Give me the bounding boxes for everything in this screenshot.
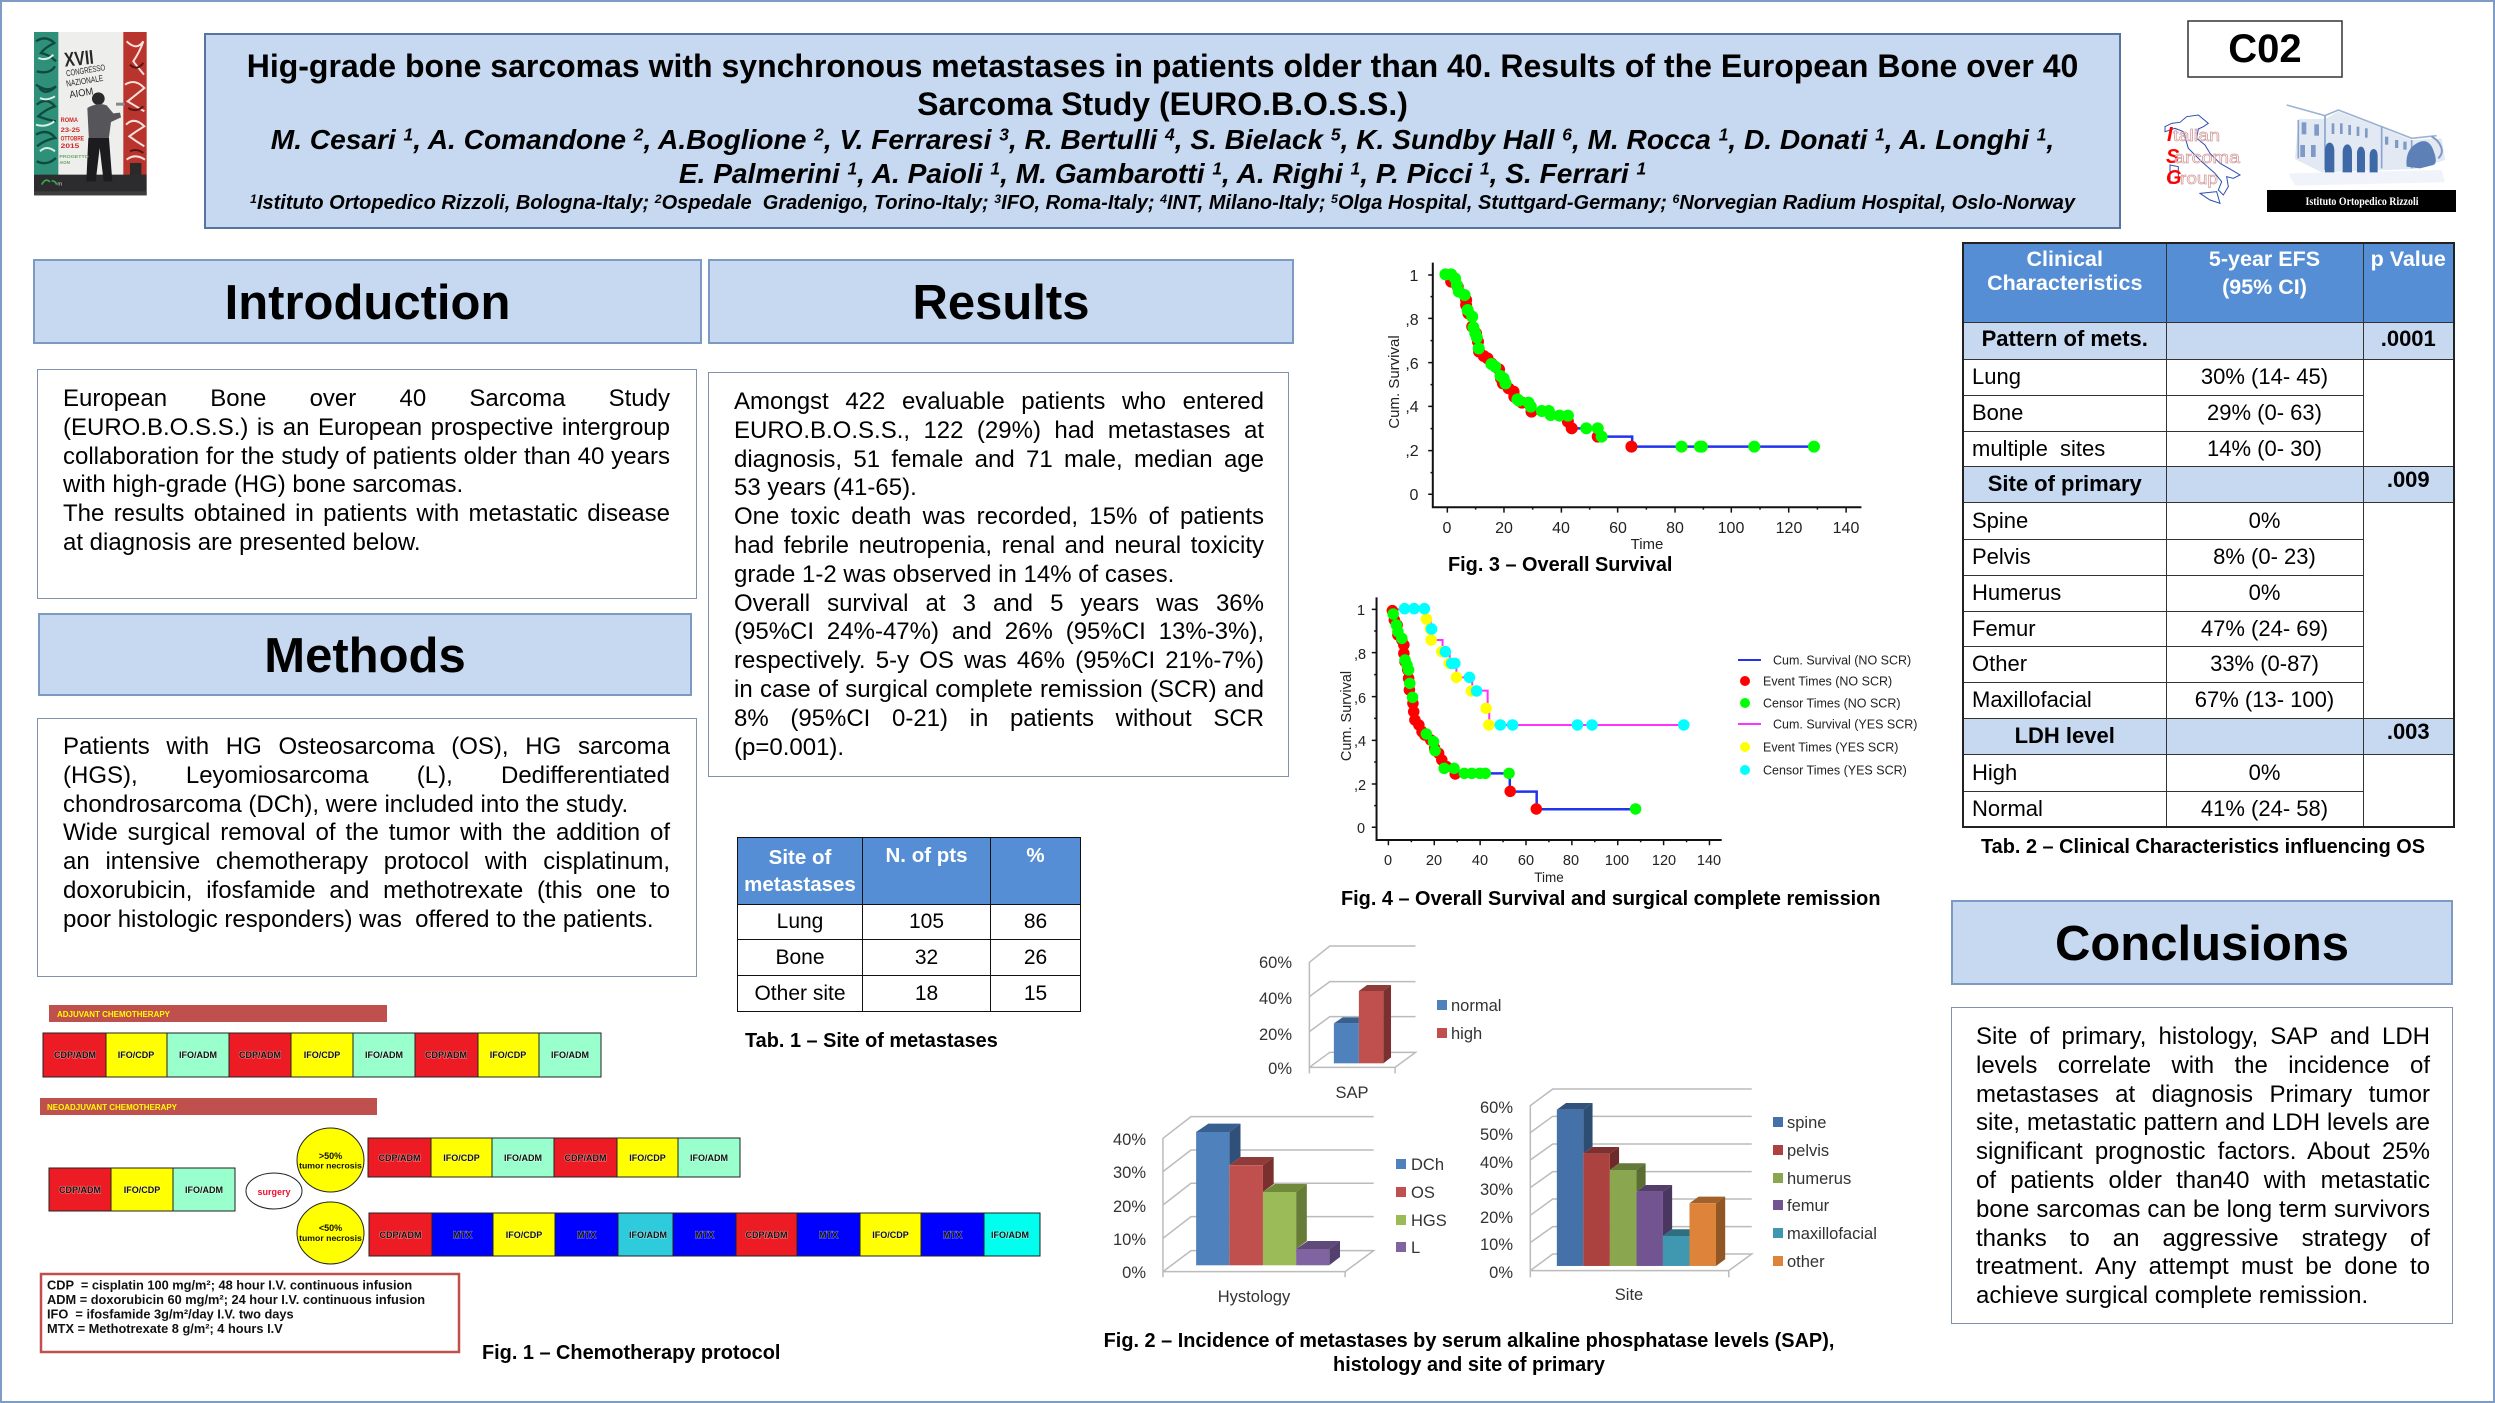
poster thumbnail logo: CONGRESSO <box>65 62 106 78</box>
table 2: clinical characteristics influencing OS: multiple sites <box>1972 436 2105 461</box>
table 2: clinical characteristics influencing OS: High <box>1972 760 2017 784</box>
axis labels: 1 <box>1357 603 1365 619</box>
poor responder cycle row: MTX <box>577 1230 596 1240</box>
adjuvant cycle row: IFO/ADM <box>365 1050 403 1060</box>
axis labels: Cum. Survival <box>1339 671 1355 761</box>
poster thumbnail logo: PROGETTO <box>59 154 89 159</box>
axis labels: ,2 <box>1354 778 1366 794</box>
poster thumbnail logo: m <box>57 181 62 187</box>
axis labels: 100 <box>1718 520 1744 537</box>
table 2: clinical characteristics influencing OS: .0001 <box>2381 326 2436 350</box>
axis labels: 20 <box>1426 853 1442 869</box>
axis labels: 1 <box>1410 268 1419 285</box>
Italian Sarcoma Group logo: S <box>2166 146 2180 168</box>
drug legend: IFO = ifosfamide 3g/m²/day I.V. two days <box>47 1306 294 1322</box>
panel: introduction text: with high-grade (HG) bone sarcomas. <box>63 471 463 498</box>
caption: figure 2: histology and site of primary <box>1333 1354 1605 1376</box>
figure 2: primary site bar chart: femur <box>1787 1197 1830 1215</box>
panel: results text: Amongst 422 evaluable patients who entered <box>734 388 1264 415</box>
table 2: clinical characteristics influencing OS: Characteristics <box>1987 271 2142 295</box>
legend: Censor Times (YES SCR) <box>1763 764 1907 778</box>
table 1: site of metastases: 86 <box>1024 910 1047 933</box>
table 2: clinical characteristics influencing OS: Humerus <box>1972 580 2061 605</box>
panel: results text: diagnosis, 51 female and 71 male, median age <box>734 446 1264 473</box>
figure 2: primary site bar chart: humerus <box>1787 1170 1851 1188</box>
heading: introduction: Introduction <box>225 276 510 330</box>
panel: methods text: poor histologic responders) was offered to the patients. <box>63 906 654 933</box>
adjuvant banner <box>49 1005 387 1022</box>
good response node: tumor necrosis <box>299 1160 362 1170</box>
panel: methods text: Wide surgical removal of the tumor with the addition of <box>63 819 670 846</box>
good response node: >50% <box>319 1151 342 1161</box>
axis labels: ,8 <box>1405 312 1419 329</box>
figure 2: primary site bar chart: 40% <box>1480 1154 1513 1172</box>
panel: introduction text: collaboration for the study of patients older than 40 years <box>63 443 670 470</box>
adjuvant cycle row: IFO/CDP <box>490 1050 526 1060</box>
figure 2: primary site bar chart: 0% <box>1489 1264 1513 1282</box>
panel: introduction text <box>37 369 697 599</box>
good responder cycle row <box>368 1138 740 1177</box>
table 1: site of metastases: % <box>1026 844 1045 867</box>
neoadjuvant induction row: IFO/ADM <box>185 1185 223 1195</box>
heading: introduction <box>33 259 702 344</box>
table 1: site of metastases: 26 <box>1024 946 1047 968</box>
Italian Sarcoma Group logo: arcoma <box>2174 148 2241 167</box>
table 2: clinical characteristics influencing OS: p Value <box>2371 247 2446 271</box>
axis labels: 80 <box>1666 520 1684 537</box>
good responder cycle row: CDP/ADM <box>378 1153 420 1163</box>
poor responder cycle row: MTX <box>453 1230 472 1240</box>
neoadjuvant induction row: IFO/CDP <box>124 1185 160 1195</box>
table 2: clinical characteristics influencing OS: 0% <box>2249 580 2280 605</box>
heading: conclusions <box>1951 900 2453 985</box>
axis labels: 120 <box>1652 853 1676 869</box>
figure 2: histology bar chart: L <box>1411 1239 1420 1257</box>
table 1: site of metastases: N. of pts <box>886 844 968 867</box>
legend: Event Times (YES SCR) <box>1763 740 1898 754</box>
table 1: site of metastases: Lung <box>777 910 823 933</box>
table 1: site of metastases: 105 <box>909 910 944 933</box>
figure 2: primary site bar chart: pelvis <box>1787 1142 1829 1160</box>
panel: conclusions text: significant prognostic factors. About 25% <box>1976 1138 2430 1165</box>
table 2: clinical characteristics influencing OS: .009 <box>2387 467 2430 492</box>
Istituto Ortopedico Rizzoli logo: Istituto Ortopedico Rizzoli <box>2306 196 2419 208</box>
caption: table 1: Tab. 1 – Site of metastases <box>745 1030 998 1052</box>
table 2: clinical characteristics influencing OS: Site of primary <box>1988 471 2142 496</box>
good responder cycle row: IFO/ADM <box>690 1153 728 1163</box>
surgery node: surgery <box>257 1187 291 1197</box>
good responder cycle row: IFO/CDP <box>443 1153 480 1163</box>
panel: methods text: doxorubicin, ifosfamide and methotrexate (this one to <box>63 877 670 904</box>
adjuvant cycle row: IFO/ADM <box>179 1050 217 1060</box>
caption: figure 1: Fig. 1 – Chemotherapy protocol <box>482 1342 780 1364</box>
table 2: clinical characteristics influencing OS: (95% CI) <box>2222 275 2307 299</box>
table 2: clinical characteristics influencing OS <box>1962 242 2455 828</box>
poster thumbnail logo: ROMA <box>61 117 78 124</box>
panel: results text: grade 1-2 was observed in 14% of cases. <box>734 561 1174 588</box>
Italian Sarcoma Group logo: I <box>2167 124 2173 146</box>
axes <box>1428 263 1861 513</box>
figure 1: chemotherapy protocol <box>40 1005 1040 1352</box>
panel: conclusions text: bone sarcomas can be long term survivors <box>1976 1196 2430 1223</box>
table 2: clinical characteristics influencing OS: 14% (0- 30) <box>2207 436 2322 461</box>
figure 2: SAP bar chart <box>1259 946 1501 1102</box>
figure 2: primary site bar chart <box>1480 1089 1877 1304</box>
axis labels: 0 <box>1357 821 1365 837</box>
figure 2: histology bar chart <box>1113 1117 1447 1306</box>
adjuvant cycle row <box>43 1033 601 1077</box>
axis labels: 100 <box>1605 853 1629 869</box>
heading: results: Results <box>912 276 1090 330</box>
poor responder cycle row <box>369 1213 1040 1256</box>
panel: results text: Overall survival at 3 and 5 years was 36% <box>734 590 1264 617</box>
table 1: site of metastases: Bone <box>775 946 825 968</box>
adjuvant cycle row: IFO/ADM <box>551 1050 589 1060</box>
figure 2: histology bar chart: 30% <box>1113 1164 1146 1182</box>
axis labels: ,6 <box>1405 356 1419 373</box>
poster thumbnail logo <box>34 32 147 195</box>
table 2: clinical characteristics influencing OS: 29% (0- 63) <box>2207 400 2322 425</box>
table 2: clinical characteristics influencing OS: Clinical <box>2027 247 2103 271</box>
axis labels: Cum. Survival <box>1386 335 1403 429</box>
legend: Cum. Survival (NO SCR) <box>1773 654 1911 668</box>
panel: methods text <box>37 718 697 977</box>
poor responder cycle row: IFO/ADM <box>629 1230 667 1240</box>
curves <box>1372 597 1722 845</box>
poster thumbnail logo: 2015 <box>61 143 80 150</box>
drug legend: ADM = doxorubicin 60 mg/m²; 24 hour I.V. continuous infusion <box>47 1292 425 1307</box>
panel: results text: respectively. 5-y OS was 46% (95%CI 21%-7%) <box>734 647 1264 674</box>
table 1: site of metastases <box>737 837 1081 1012</box>
authors: M. Cesari 1, A. Comandone 2, A.Boglione 2, V. Ferraresi 3, R. Bertulli 4, S. Bielack 5, K. Sundby Hall 6, M. Rocca 1, D. Donati 1, A. Longhi 1, E. Palmerini 1, A. Paioli 1, M. Gambarotti 1, A. Righi 1, P. Picci 1, S. Ferrari 1 <box>271 124 2054 189</box>
figure 2: histology bar chart: 20% <box>1113 1198 1146 1216</box>
table 1: site of metastases: Site of <box>769 846 831 869</box>
poor responder cycle row: CDP/ADM <box>746 1230 788 1240</box>
C02 poster code: C02 <box>2228 27 2302 71</box>
poor response node <box>297 1202 364 1264</box>
figure 2: SAP bar chart: 40% <box>1259 990 1292 1008</box>
table 2: clinical characteristics influencing OS: Femur <box>1972 616 2036 641</box>
drug legend: CDP = cisplatin 100 mg/m²; 48 hour I.V. continuous infusion <box>47 1278 412 1292</box>
poor responder cycle row: MTX <box>819 1230 838 1240</box>
figure 2: SAP bar chart: 60% <box>1259 954 1292 972</box>
adjuvant banner: ADJUVANT CHEMOTHERAPY <box>57 1010 171 1019</box>
adjuvant cycle row: IFO/CDP <box>118 1050 154 1060</box>
axis labels: 60 <box>1609 520 1627 537</box>
axis labels: 0 <box>1384 853 1392 869</box>
neoadjuvant induction row: CDP/ADM <box>59 1185 101 1195</box>
figure 2: primary site bar chart: maxillofacial <box>1787 1225 1877 1243</box>
panel: results text: (95%CI 24%-47%) and 26% (95%CI 13%-3%), <box>734 618 1264 645</box>
axis labels: 0 <box>1410 487 1419 504</box>
poster thumbnail logo: OTTOBRE <box>61 136 84 143</box>
axis labels: 80 <box>1563 853 1579 869</box>
panel: conclusions text: achieve surgical complete remission. <box>1976 1282 2368 1309</box>
legend <box>1738 654 1917 778</box>
axis labels <box>1386 268 1859 553</box>
panel: methods text: (HGS), Leyomiosarcoma (L), Dedifferentiated <box>63 762 670 789</box>
axis labels: 120 <box>1776 520 1802 537</box>
adjuvant cycle row: CDP/ADM <box>425 1050 467 1060</box>
table 2: clinical characteristics influencing OS: 47% (24- 69) <box>2201 616 2328 641</box>
panel: results text: (p=0.001). <box>734 734 844 761</box>
heading: methods <box>38 613 692 696</box>
poster thumbnail logo: AIOM <box>69 86 94 101</box>
caption: figure 4: Fig. 4 – Overall Survival and surgical complete remission <box>1341 888 1880 910</box>
panel: conclusions text: metastases at diagnosis Primary tumor <box>1976 1081 2430 1108</box>
table 2: clinical characteristics influencing OS: Other <box>1972 651 2027 676</box>
table 2: clinical characteristics influencing OS: Maxillofacial <box>1972 687 2092 712</box>
axis labels: ,4 <box>1354 734 1366 750</box>
heading: conclusions: Conclusions <box>2055 916 2349 970</box>
figure 4: survival by surgical complete remission <box>1339 597 1917 885</box>
neoadjuvant banner <box>40 1098 377 1115</box>
table 2: clinical characteristics influencing OS: Spine <box>1972 508 2028 532</box>
figure 2: primary site bar chart: 30% <box>1480 1181 1513 1199</box>
poor responder cycle row: MTX <box>695 1230 714 1240</box>
figure 2: primary site bar chart: 20% <box>1480 1209 1513 1227</box>
figure 2: SAP bar chart: high <box>1451 1025 1482 1043</box>
figure 2: primary site bar chart: 50% <box>1480 1126 1513 1144</box>
panel: introduction text: (EURO.B.O.S.S.) is an European prospective intergroup <box>63 414 670 441</box>
table 2: clinical characteristics influencing OS: 30% (14- 45) <box>2201 364 2328 389</box>
table 2: clinical characteristics influencing OS: Lung <box>1972 364 2021 389</box>
poster thumbnail logo: NAZIONALE <box>65 73 104 89</box>
axis labels: 60 <box>1518 853 1534 869</box>
title banner <box>204 33 2121 229</box>
surgery node <box>246 1173 302 1209</box>
poor responder cycle row: IFO/CDP <box>506 1230 542 1240</box>
poster thumbnail logo: AIOM <box>59 160 70 165</box>
axis labels: 140 <box>1697 853 1721 869</box>
Italian Sarcoma Group logo <box>2165 115 2241 203</box>
figure 2: SAP bar chart: 0% <box>1268 1060 1292 1078</box>
table 1: site of metastases: 15 <box>1024 982 1047 1004</box>
panel: results text: 53 years (41-65). <box>734 474 917 501</box>
figure 2: histology bar chart: 10% <box>1113 1231 1146 1249</box>
panel: results text: had febrile neutropenia, renal and neural toxicity <box>734 532 1264 559</box>
legend: Censor Times (NO SCR) <box>1763 696 1901 710</box>
poor response node: <50% <box>319 1223 342 1233</box>
table 2: clinical characteristics influencing OS: Normal <box>1972 796 2043 820</box>
axis labels: 40 <box>1552 520 1570 537</box>
axis labels: Time <box>1631 536 1663 553</box>
table 2: clinical characteristics influencing OS: .003 <box>2387 718 2430 744</box>
axis labels: ,4 <box>1405 399 1419 416</box>
table 2: clinical characteristics influencing OS: 8% (0- 23) <box>2213 544 2316 569</box>
panel: results text: One toxic death was recorded, 15% of patients <box>734 503 1264 530</box>
axis labels: 40 <box>1472 853 1488 869</box>
good responder cycle row: CDP/ADM <box>564 1153 606 1163</box>
poor responder cycle row: IFO/CDP <box>872 1230 909 1240</box>
table 2: clinical characteristics influencing OS: 67% (13- 100) <box>2195 687 2334 712</box>
table 1: site of metastases: Other site <box>754 982 846 1004</box>
poor responder cycle row: IFO/ADM <box>991 1230 1029 1240</box>
panel: methods text: an intensive chemotherapy protocol with cisplatinum, <box>63 848 670 875</box>
figure 3: overall survival curve <box>1386 263 1861 553</box>
caption: figure 3: Fig. 3 – Overall Survival <box>1448 554 1672 576</box>
panel: results text: in case of surgical complete remission (SCR) and <box>734 676 1264 703</box>
legend: Event Times (NO SCR) <box>1763 674 1892 688</box>
axis labels: 140 <box>1833 520 1859 537</box>
panel: conclusions text: thanks to an aggressive strategy of <box>1976 1225 2430 1252</box>
title: Hig-grade bone sarcomas with synchronous metastases in patients older than 40. Results of the European Bone over 40 Sarcoma Study (EURO.B.O.S.S.) <box>247 48 2078 122</box>
axis labels <box>1339 603 1721 885</box>
figure 2: primary site bar chart: other <box>1787 1253 1825 1271</box>
panel: introduction text: The results obtained in patients with metastatic disease <box>63 500 670 527</box>
table 2: clinical characteristics influencing OS: Bone <box>1972 400 2023 425</box>
table 2: clinical characteristics influencing OS: 0% <box>2249 760 2280 784</box>
drug legend: MTX = Methotrexate 8 g/m²; 4 hours I.V <box>47 1321 283 1336</box>
figure 2: histology bar chart: 40% <box>1113 1131 1146 1149</box>
table 2: clinical characteristics influencing OS: Pelvis <box>1972 544 2031 569</box>
table 2: clinical characteristics influencing OS: 33% (0-87) <box>2210 651 2319 676</box>
figure 2: SAP bar chart: 20% <box>1259 1026 1292 1044</box>
heading: methods: Methods <box>264 628 466 682</box>
figure 2: primary site bar chart: 10% <box>1480 1236 1513 1254</box>
figure 2: histology bar chart: 0% <box>1122 1264 1146 1282</box>
panel: introduction text: European Bone over 40 Sarcoma Study <box>63 385 670 412</box>
figure 2: SAP bar chart: SAP <box>1335 1084 1369 1102</box>
axis labels: 0 <box>1443 520 1452 537</box>
C02 poster code <box>2188 21 2342 77</box>
panel: methods text: chondrosarcoma (DCh), were included into the study. <box>63 791 628 818</box>
panel: introduction text: at diagnosis are presented below. <box>63 529 421 556</box>
table 1: site of metastases: 32 <box>915 946 938 968</box>
poor response node: tumor necrosis <box>299 1233 362 1243</box>
table 2: clinical characteristics influencing OS: Pattern of mets. <box>1982 326 2148 350</box>
adjuvant cycle row: CDP/ADM <box>239 1050 281 1060</box>
table 1: site of metastases: metastases <box>744 873 856 896</box>
table 2: clinical characteristics influencing OS: 0% <box>2249 508 2280 532</box>
panel: results text: EURO.B.O.S.S., 122 (29%) had metastases at <box>734 417 1264 444</box>
panel: conclusions text: treatment. Any attempt must be done to <box>1976 1253 2430 1280</box>
adjuvant cycle row: CDP/ADM <box>54 1050 96 1060</box>
Italian Sarcoma Group logo: talian <box>2173 126 2220 145</box>
adjuvant cycle row: IFO/CDP <box>304 1050 340 1060</box>
affiliations: 1Istituto Ortopedico Rizzoli, Bologna-Italy; 2Ospedale Gradenigo, Torino-Italy; 3IFO, Roma-Italy; 4INT, Milano-Italy; 5Olga Hospital, Stuttgard-Germany; 6Norvegian Radium Hospital, Oslo-Norway <box>250 192 2075 214</box>
table 2: clinical characteristics influencing OS: LDH level <box>2015 723 2115 748</box>
figure 2: histology bar chart: HGS <box>1411 1212 1447 1230</box>
figure 2: primary site bar chart: 60% <box>1480 1099 1513 1117</box>
figure 2: primary site bar chart: Site <box>1615 1286 1643 1304</box>
figure 2: SAP bar chart: normal <box>1451 997 1501 1015</box>
figure 2: primary site bar chart: spine <box>1787 1114 1826 1132</box>
legend: Cum. Survival (YES SCR) <box>1773 718 1917 732</box>
panel: results text: 8% (95%CI 0-21) in patients without SCR <box>734 705 1264 732</box>
table 2: clinical characteristics influencing OS: 41% (24- 58) <box>2201 796 2328 820</box>
good responder cycle row: IFO/CDP <box>629 1153 666 1163</box>
panel: conclusions text <box>1951 1007 2453 1324</box>
panel: results text <box>708 372 1289 777</box>
poor responder cycle row: CDP/ADM <box>380 1230 422 1240</box>
Italian Sarcoma Group logo: roup <box>2180 169 2218 188</box>
figure 2: histology bar chart: OS <box>1411 1184 1435 1202</box>
figure 2: histology bar chart: Hystology <box>1218 1288 1291 1306</box>
panel: conclusions text: levels correlate with the incidence of <box>1976 1052 2430 1079</box>
drug legend <box>41 1274 459 1352</box>
axis labels: ,8 <box>1354 647 1366 663</box>
caption: figure 2: Fig. 2 – Incidence of metastases by serum alkaline phosphatase levels (SAP), <box>1104 1330 1834 1352</box>
panel: methods text: Patients with HG Osteosarcoma (OS), HG sarcoma <box>63 733 670 760</box>
neoadjuvant banner: NEOADJUVANT CHEMOTHERAPY <box>47 1103 178 1112</box>
good response node <box>297 1128 364 1192</box>
figure 2: histology bar chart: DCh <box>1411 1156 1444 1174</box>
Istituto Ortopedico Rizzoli logo <box>2267 105 2456 212</box>
Italian Sarcoma Group logo: G <box>2166 167 2182 189</box>
panel: conclusions text: Site of primary, histology, SAP and LDH <box>1976 1023 2430 1050</box>
poster thumbnail logo: 23-25 <box>61 127 80 134</box>
axis labels: ,2 <box>1405 443 1419 460</box>
heading: results <box>708 259 1294 344</box>
caption: table 2: Tab. 2 – Clinical Characteristics influencing OS <box>1981 836 2425 858</box>
panel: conclusions text: site, metastatic pattern and LDH levels are <box>1976 1109 2430 1136</box>
axis labels: Time <box>1534 870 1564 885</box>
poster thumbnail logo: XVII <box>63 47 95 72</box>
good responder cycle row: IFO/ADM <box>504 1153 542 1163</box>
table 2: clinical characteristics influencing OS: 5-year EFS <box>2209 247 2320 271</box>
panel: conclusions text: of patients older than40 with metastatic <box>1976 1167 2430 1194</box>
axis labels: 20 <box>1495 520 1513 537</box>
caption: figure 2 <box>1104 1330 1834 1376</box>
neoadjuvant induction row <box>49 1168 235 1211</box>
poor responder cycle row: MTX <box>943 1230 962 1240</box>
axis labels: ,6 <box>1354 691 1366 707</box>
table 1: site of metastases: 18 <box>915 982 938 1004</box>
